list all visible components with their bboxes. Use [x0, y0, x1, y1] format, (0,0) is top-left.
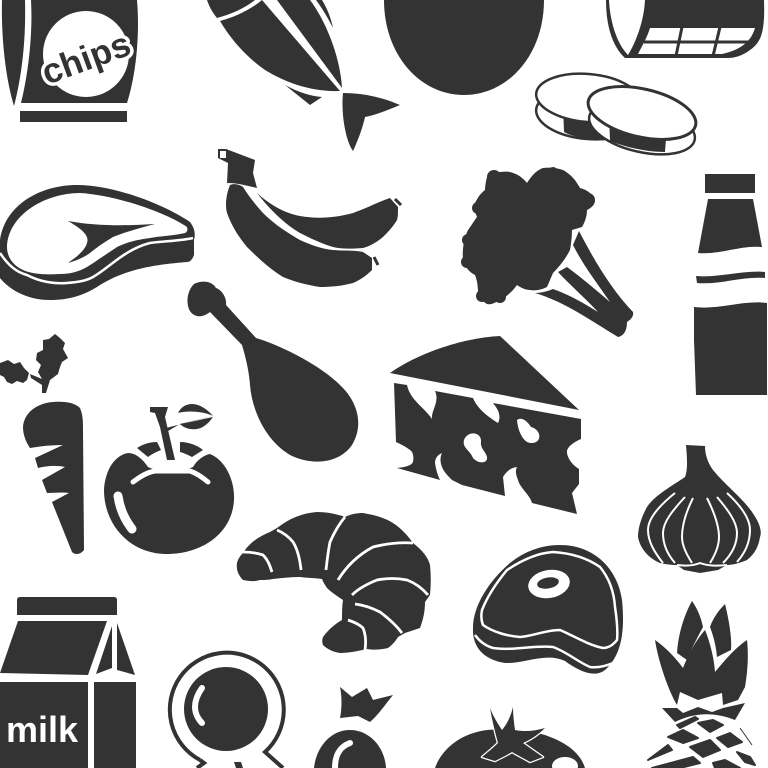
icon: bottle — [694, 174, 767, 395]
icon: steak with marrow — [473, 545, 623, 674]
icon: t-bone steak — [0, 185, 195, 300]
icon: pineapple — [648, 601, 755, 768]
icon: wrapped candy — [314, 687, 393, 768]
icon: ham — [606, 0, 764, 58]
icon: bananas — [218, 149, 401, 287]
icon: ham slices — [534, 70, 701, 164]
icon: milk carton: milk — [6, 709, 79, 750]
icon: fish — [207, 0, 400, 151]
icon: broccoli — [461, 167, 633, 337]
icon: tomato with star stem — [435, 707, 585, 768]
icon: garlic — [638, 445, 761, 573]
icon: apple — [104, 404, 234, 554]
icon: croissant — [237, 512, 431, 653]
icon: cheese — [390, 336, 581, 514]
icon: chips bag — [2, 0, 138, 122]
icon: carrot — [0, 334, 84, 554]
icon: chips bag: chips — [37, 25, 136, 92]
icon: round fruit — [384, 0, 544, 95]
icon: medal orange — [170, 653, 284, 768]
icon: milk carton — [0, 597, 136, 768]
icon: chicken drumstick — [187, 282, 358, 462]
